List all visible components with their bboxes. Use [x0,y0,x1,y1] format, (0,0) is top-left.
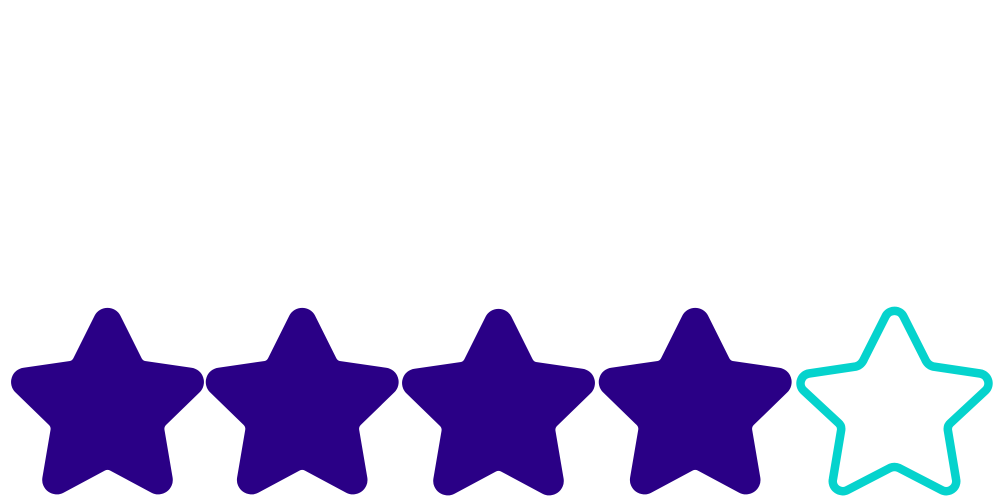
icon: outlined empty star [801,311,988,491]
icon: filled star 4 [599,308,792,494]
icon: filled star 3 [402,309,595,495]
icon: filled star 2 [206,308,399,494]
icon: filled star 1 [11,308,204,494]
